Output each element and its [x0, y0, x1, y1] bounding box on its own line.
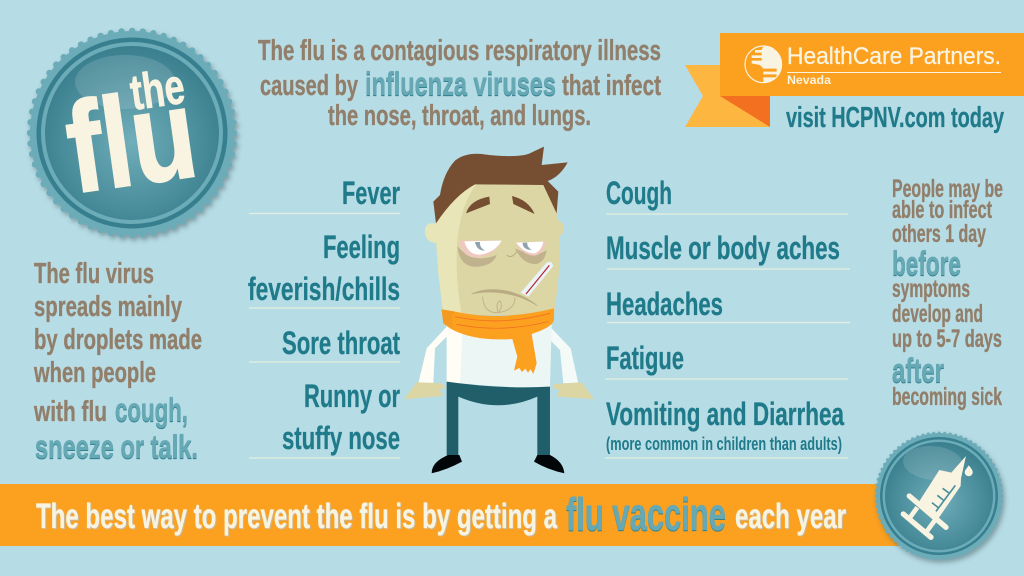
right symptoms list: (more common in children than adults): [606, 434, 842, 454]
left text: how flu spreads: cough,: [115, 391, 188, 428]
hair: [433, 147, 568, 223]
mouth: [472, 290, 537, 306]
right text: contagious period: before: [892, 245, 961, 283]
left symptoms list: Feeling: [323, 229, 400, 265]
scarf: [442, 308, 554, 374]
intro text: influenza viruses: [365, 65, 556, 102]
right text: contagious period: [892, 175, 1003, 411]
left symptoms list: Fever: [342, 175, 400, 211]
right text: contagious period: symptoms: [892, 275, 970, 303]
badge: the flu: [30, 31, 234, 235]
left text: how flu spreads: when people: [33, 357, 156, 389]
left symptoms list: Runny or: [304, 378, 400, 414]
left symptoms list: Sore throat: [282, 325, 400, 361]
right symptoms list: Headaches: [606, 286, 723, 322]
left text: how flu spreads: [33, 258, 202, 465]
left text: how flu spreads: by droplets made: [34, 324, 202, 356]
nose: [507, 252, 517, 257]
badge: the flu: flu: [58, 61, 205, 221]
right symptoms list: Cough: [606, 175, 672, 211]
logo ribbon: Nevada: [787, 75, 832, 87]
logo ribbon: HealthCare Partners.: [787, 43, 1001, 70]
intro text: [258, 35, 661, 132]
thermometer: [521, 262, 553, 297]
head: [425, 147, 568, 315]
badge: the flu: the: [127, 58, 188, 121]
bottom banner: [0, 484, 900, 546]
right symptoms list: [605, 175, 850, 458]
arms and shirt: [418, 325, 578, 387]
trousers: [447, 382, 550, 456]
left text: how flu spreads: with flu: [33, 396, 107, 428]
bottom banner: flu vaccine: [566, 488, 726, 540]
shoes: [432, 455, 564, 473]
intro text: that infect: [562, 70, 661, 102]
intro text: the nose, throat, and lungs.: [328, 100, 591, 132]
logo ribbon: [685, 33, 1024, 127]
right symptoms list: Muscle or body aches: [606, 230, 840, 266]
left symptoms list: [248, 175, 400, 458]
icon: syringe: [903, 456, 973, 537]
eyes: [459, 241, 502, 258]
left text: how flu spreads: The flu virus: [34, 258, 154, 290]
eyebrows: [466, 196, 535, 214]
illustration: sick man: [404, 147, 594, 473]
left symptoms list: stuffy nose: [282, 420, 400, 456]
icon: healthcare partners logo: [745, 46, 782, 83]
right text: contagious period: after: [892, 352, 944, 390]
intro text: The flu is a contagious respiratory illness: [258, 35, 661, 67]
intro text: caused by: [260, 70, 358, 102]
left text: how flu spreads: spreads mainly: [34, 291, 182, 323]
bottom banner: The best way to prevent the flu is by getting a: [36, 497, 557, 536]
hands: [404, 382, 594, 399]
left symptoms list: feverish/chills: [248, 271, 400, 307]
badge: syringe: [876, 433, 1002, 559]
left text: how flu spreads: sneeze or talk.: [35, 428, 198, 465]
right symptoms list: Fatigue: [606, 340, 684, 376]
bottom banner: each year: [735, 497, 846, 536]
eye bags: [457, 247, 547, 267]
right symptoms list: Vomiting and Diarrhea: [606, 396, 844, 432]
